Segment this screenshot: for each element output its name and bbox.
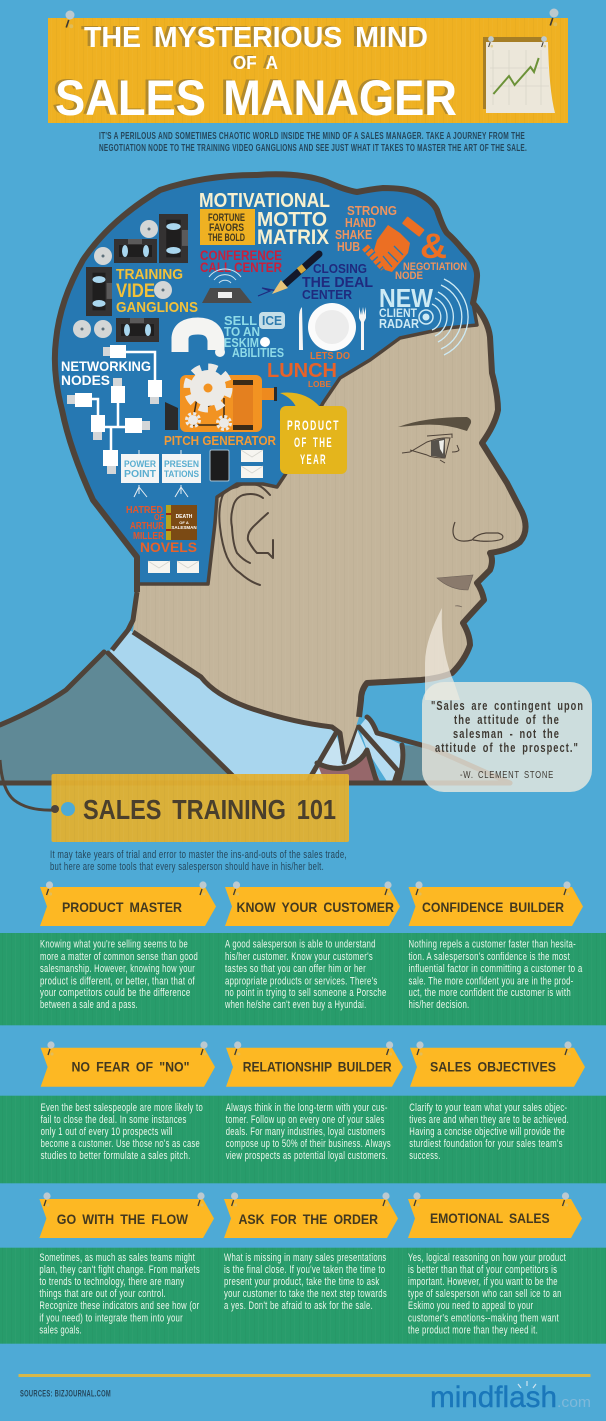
text: relationship builder bbox=[226, 1102, 391, 1162]
text: know your customer: his/her customer. Know your customer's bbox=[225, 951, 373, 963]
brain: lets do lunch lobe: LETS DO bbox=[310, 351, 350, 362]
callout: product of the year bbox=[280, 393, 347, 474]
brain: new client radar bbox=[379, 279, 468, 355]
brain: training video ganglions: GANGLIONS bbox=[116, 299, 198, 316]
brain: strong handshake hub and negotiation node: NODE bbox=[395, 270, 423, 282]
banner: emotional sales bbox=[408, 1192, 582, 1238]
brain: new client radar: CLIENT bbox=[379, 306, 418, 320]
mouth bbox=[437, 575, 473, 607]
section heading tag: sales training 101 bbox=[0, 760, 349, 842]
eye bbox=[402, 434, 459, 463]
banner: ask for the order bbox=[224, 1192, 398, 1238]
banner: confidence builder bbox=[408, 881, 583, 926]
text: ask for the order: What is missing in many sales presentations bbox=[224, 1252, 387, 1264]
text: emotional sales bbox=[408, 1252, 566, 1336]
brain: hatred of arthur miller novels: HATRED bbox=[126, 505, 163, 516]
nose bbox=[453, 522, 503, 541]
icon: book: DEATH bbox=[176, 514, 193, 520]
brain: closing the deal center bbox=[302, 261, 373, 302]
text: ask for the order: a yes. Don't be afraid to ask for the sale. bbox=[224, 1300, 373, 1312]
text: product master: Knowing what you're selling seems to be bbox=[40, 938, 188, 950]
section intro text bbox=[50, 849, 347, 873]
text: no fear of no: Even the best salespeople are more likely to bbox=[41, 1102, 203, 1114]
brain: sell ice to an eskimo abilities: SELL bbox=[224, 313, 257, 328]
sources: SOURCES: BIZJOURNAL.COM bbox=[20, 1388, 111, 1400]
brain: pitch generator machine: PITCH GENERATOR bbox=[164, 433, 277, 448]
brain: new client radar: RADAR bbox=[379, 316, 420, 331]
brain: strong handshake hub and negotiation node: STRONG bbox=[347, 203, 397, 218]
eyebrow bbox=[398, 417, 471, 431]
brain: new client radar: NEW bbox=[379, 283, 433, 313]
text: product master bbox=[40, 938, 198, 1011]
brain: strong handshake hub and negotiation node: HUB bbox=[337, 239, 360, 254]
icon: pinned chart note bbox=[483, 36, 555, 113]
callout: quote bubble bbox=[422, 608, 592, 792]
banner: relationship builder bbox=[226, 1041, 403, 1087]
banner: confidence builder: CONFIDENCE BUILDER bbox=[422, 899, 564, 915]
illustration: suit, collar and tie bbox=[0, 630, 510, 783]
text: product master: salesmanship. However, knowing how your bbox=[40, 963, 195, 975]
brain: hatred of arthur miller novels: NOVELS bbox=[140, 539, 197, 555]
brain: motivational motto matrix: FORTUNE bbox=[208, 212, 245, 224]
title text: OF A bbox=[233, 53, 278, 73]
intro text bbox=[99, 130, 527, 154]
banner: know your customer: KNOW YOUR CUSTOMER bbox=[236, 899, 394, 915]
logo: mindflash: mindflash bbox=[430, 1381, 557, 1414]
callout: quote bubble: salesman - not the bbox=[453, 726, 560, 741]
head outline bbox=[55, 174, 526, 717]
title text bbox=[55, 22, 457, 126]
text: go with the flow: to trends to technology, there are many bbox=[39, 1276, 184, 1288]
icons: tablet and envelopes bbox=[148, 450, 263, 573]
illustration: head profile bbox=[55, 174, 526, 760]
banner: ask for the order: ASK FOR THE ORDER bbox=[238, 1211, 378, 1227]
text: product master: product is different, or better, than that of bbox=[40, 976, 195, 988]
footer rule bbox=[18, 1374, 590, 1377]
brain: conference call center: CALL CENTER bbox=[200, 259, 282, 275]
brain: networking nodes bbox=[61, 345, 162, 474]
callout: quote bubble: -W. CLEMENT STONE bbox=[460, 769, 554, 781]
brain: sell ice to an eskimo abilities: ABILITIES bbox=[232, 345, 284, 360]
brain: motivational motto matrix: MOTIVATIONAL bbox=[199, 190, 330, 212]
text: ask for the order bbox=[224, 1252, 387, 1312]
panel: row 2 bbox=[0, 1041, 606, 1183]
text: product master: between a sale and a pass. bbox=[40, 999, 138, 1011]
panel: row 1 bbox=[0, 881, 606, 1025]
brain: presentation boards: POWER bbox=[124, 459, 156, 470]
brain: strong handshake hub and negotiation node: SHAKE bbox=[335, 227, 372, 242]
brain: presentation boards bbox=[121, 450, 201, 497]
text: no fear of no: become a customer. Use those no's as case bbox=[41, 1138, 200, 1150]
brain: closing the deal center: THE DEAL bbox=[302, 274, 373, 291]
brain: networking nodes: NODES bbox=[61, 372, 110, 388]
section heading tag: sales training 101: SALES TRAINING 101 bbox=[83, 794, 336, 825]
brain: hatred of arthur miller novels: ARTHUR bbox=[130, 521, 165, 532]
brain: hatred of arthur miller novels: OF bbox=[154, 513, 164, 522]
banner: no fear of no bbox=[41, 1041, 215, 1087]
icon: fountain pen bbox=[258, 254, 319, 296]
banner: go with the flow: GO WITH THE FLOW bbox=[57, 1211, 189, 1227]
text: sales objectives bbox=[409, 1102, 569, 1162]
ear bbox=[219, 484, 273, 585]
brain: training video ganglions: TRAINING bbox=[116, 266, 183, 283]
text: go with the flow bbox=[39, 1252, 200, 1336]
callout: product of the year: YEAR bbox=[300, 451, 327, 467]
banner: product master: PRODUCT MASTER bbox=[62, 899, 182, 915]
brain: conference call center: CONFERENCE bbox=[200, 247, 282, 263]
callout: quote bubble: the attitude of the bbox=[454, 712, 560, 727]
banner: relationship builder: RELATIONSHIP BUILDER bbox=[243, 1059, 392, 1075]
text: ask for the order: your customer to take the next step towards bbox=[224, 1288, 387, 1300]
callout: product of the year: PRODUCT bbox=[287, 417, 340, 433]
brain: sell ice to an eskimo abilities: ICE bbox=[262, 313, 282, 328]
text: go with the flow: if you need) to integrate them into your bbox=[39, 1312, 183, 1324]
banner: sales objectives: SALES OBJECTIVES bbox=[430, 1059, 556, 1075]
brain: closing the deal center: CENTER bbox=[302, 287, 353, 302]
panel: row 3 bbox=[0, 1192, 606, 1344]
section intro text: It may take years of trial and error to master the ins-and-outs of the sales trade, bbox=[50, 849, 347, 861]
icon: handshake: & bbox=[420, 227, 447, 266]
banner: product master bbox=[40, 881, 216, 926]
text: ask for the order: present your product, take the time to ask bbox=[224, 1276, 380, 1288]
icon: plate and cutlery bbox=[299, 303, 366, 351]
icon: book: OF A bbox=[179, 520, 189, 525]
text: no fear of no: studies to better formulate a sales pitch. bbox=[41, 1150, 191, 1162]
text: relationship builder: tomer. Follow up on every one of your sales bbox=[226, 1114, 385, 1126]
brain: sell ice to an eskimo abilities: ESKIM bbox=[224, 335, 259, 350]
text: confidence builder bbox=[408, 938, 583, 1011]
text: know your customer bbox=[224, 938, 386, 1011]
brain: presentation boards: PRESEN bbox=[164, 459, 199, 470]
title banner bbox=[48, 8, 568, 126]
text: go with the flow: sales goals. bbox=[39, 1324, 82, 1336]
brain: lets do lunch lobe bbox=[267, 351, 350, 389]
text: no fear of no bbox=[41, 1102, 203, 1162]
text: relationship builder: view prospects as potential loyal customers. bbox=[226, 1150, 388, 1162]
text: no fear of no: fail to close the deal. In some instances bbox=[41, 1114, 187, 1126]
text: emotional sales: Eskimo you need to appeal to your bbox=[408, 1300, 533, 1312]
brain: networking nodes: NETWORKING bbox=[61, 358, 151, 374]
text: know your customer: appropriate products or services. There's bbox=[225, 976, 378, 988]
banner: know your customer bbox=[225, 881, 400, 926]
text: relationship builder: Always think in the long-term with your cus- bbox=[226, 1102, 388, 1114]
text: emotional sales: the product more than they need it. bbox=[408, 1324, 538, 1336]
logo: mindflash: .com bbox=[557, 1394, 591, 1411]
section intro text: but here are some tools that every salesperson should have in his/her belt. bbox=[50, 861, 324, 873]
title text: THE MYSTERIOUS MIND bbox=[84, 22, 428, 54]
brain: strong handshake hub and negotiation node: NEGOTIATION bbox=[403, 261, 467, 273]
text: know your customer: A good salesperson is able to understand bbox=[225, 938, 376, 950]
brain: hatred of arthur miller novels bbox=[126, 505, 197, 555]
brain: training video ganglions: VIDE bbox=[116, 281, 155, 302]
brain: motivational motto matrix: MOTTO bbox=[257, 209, 327, 231]
brain: presentation boards: TATIONS bbox=[164, 469, 199, 480]
brain: lets do lunch lobe: LUNCH bbox=[267, 360, 337, 382]
brain: pitch generator machine bbox=[164, 367, 277, 448]
banner: go with the flow bbox=[39, 1192, 214, 1238]
brain: sell ice to an eskimo abilities bbox=[180, 312, 285, 360]
text: go with the flow: plan, they can't fight change. From markets bbox=[39, 1264, 200, 1276]
brain: hatred of arthur miller novels: MILLER bbox=[133, 531, 165, 542]
text: go with the flow: Sometimes, as much as sales teams might bbox=[39, 1252, 195, 1264]
brain: sell ice to an eskimo abilities: TO AN bbox=[224, 324, 260, 339]
text: confidence builder: his/her decision. bbox=[408, 999, 470, 1011]
brain: motivational motto matrix: THE BOLD bbox=[208, 232, 245, 244]
icon: book: SALESMAN bbox=[171, 525, 197, 530]
brain: strong handshake hub and negotiation node: HAND bbox=[345, 215, 376, 230]
text: go with the flow: things that are out of your control. bbox=[39, 1288, 166, 1300]
banner: emotional sales: EMOTIONAL SALES bbox=[430, 1210, 550, 1226]
text: no fear of no: only 1 out of every 10 prospects will bbox=[41, 1126, 173, 1138]
text: go with the flow: Recognize these indicators and see how (or bbox=[39, 1300, 200, 1312]
text: ask for the order: is the final close. If you've taken the time to bbox=[224, 1264, 385, 1276]
text: relationship builder: compose up to 50% of their business. Always bbox=[226, 1138, 391, 1150]
banner: sales objectives bbox=[410, 1041, 585, 1087]
text: know your customer: tastes so that you can offer him or her bbox=[225, 963, 366, 975]
brain: motivational motto matrix: MATRIX bbox=[257, 226, 329, 249]
callout: product of the year: OF THE bbox=[294, 434, 333, 450]
brain: strong handshake hub and negotiation node bbox=[335, 203, 467, 282]
text: know your customer: when he/she can't even buy a Hyundai. bbox=[224, 999, 366, 1011]
brain: presentation boards: POINT bbox=[124, 469, 156, 480]
icon: book bbox=[166, 505, 197, 540]
brain area bbox=[55, 174, 477, 584]
brain: conference call center bbox=[200, 247, 282, 303]
brain: lets do lunch lobe: LOBE bbox=[308, 380, 332, 389]
text: sales objectives: success. bbox=[409, 1150, 441, 1162]
brain: closing the deal center: CLOSING bbox=[313, 261, 367, 276]
text: know your customer: no point in trying to sell someone a Porsche bbox=[225, 987, 386, 999]
title text: SALES MANAGER bbox=[55, 70, 457, 126]
text: relationship builder: deals. For many industries, loyal customers bbox=[226, 1126, 385, 1138]
brain: training video ganglions bbox=[73, 214, 198, 342]
text: product master: more a matter of common sense than good bbox=[40, 951, 198, 963]
brain: motivational motto matrix: FAVORS bbox=[209, 222, 244, 234]
brain: motivational motto matrix bbox=[199, 190, 330, 249]
text: product master: your competitors could be the difference bbox=[40, 987, 190, 999]
banner: no fear of no: NO FEAR OF "NO" bbox=[72, 1059, 190, 1075]
